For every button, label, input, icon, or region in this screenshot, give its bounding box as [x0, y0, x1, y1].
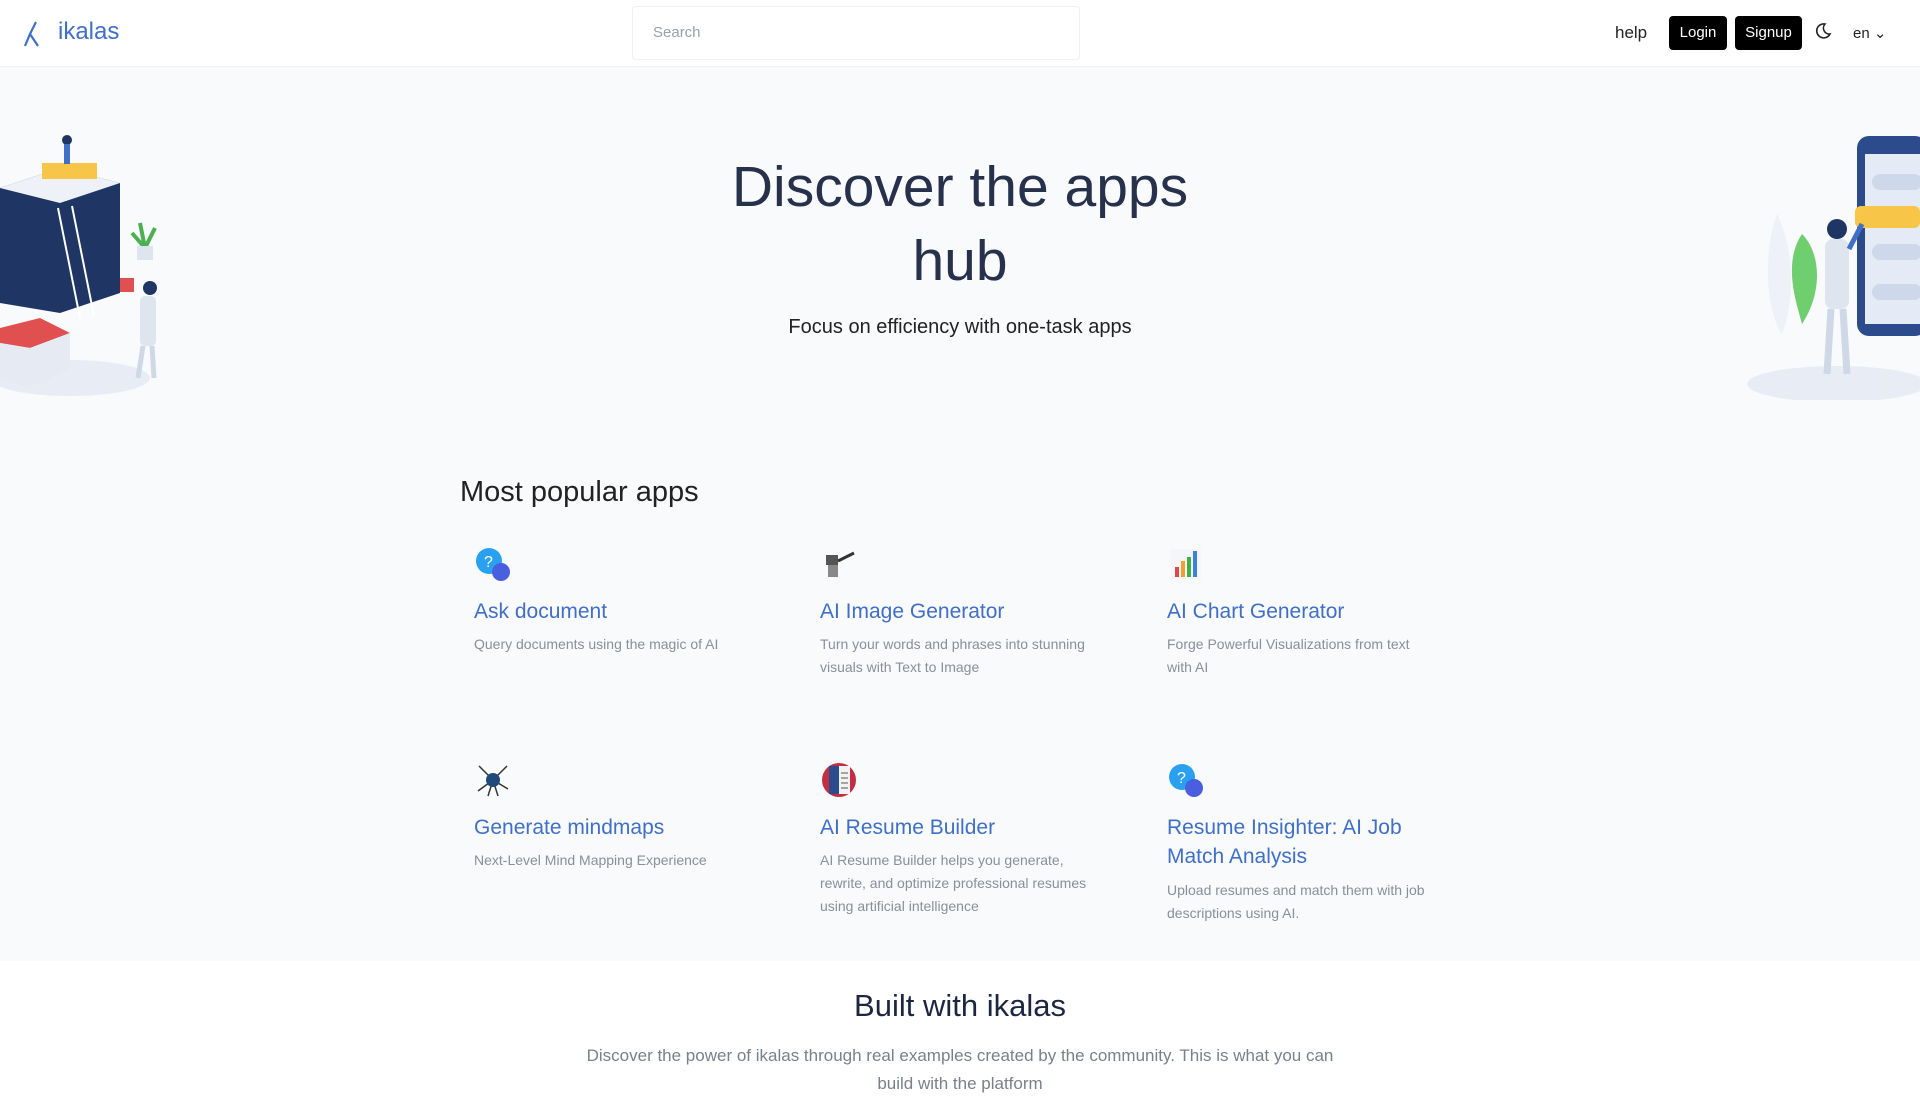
card: ai resume builder: AI Resume Builder helps you generate, — [820, 852, 1064, 868]
illustration: left — [0, 135, 157, 396]
title: Discover the apps — [732, 155, 1188, 219]
icon: question bubble: ? — [1177, 770, 1186, 787]
icon: resume — [822, 763, 856, 797]
card: resume insighter: Resume Insighter: AI Job — [1167, 816, 1402, 839]
card: resume insighter — [1167, 764, 1425, 921]
button: login — [1669, 16, 1727, 50]
subtitle: Focus on efficiency with one-task apps — [788, 316, 1132, 338]
card: ai resume builder: AI Resume Builder — [820, 816, 995, 839]
card: ai image generator — [820, 552, 1085, 675]
section heading: most popular apps: Most popular apps — [460, 476, 699, 508]
card: ai image generator: AI Image Generator — [820, 600, 1004, 623]
card: ai chart generator: AI Chart Generator — [1167, 600, 1344, 623]
card: ai resume builder: rewrite, and optimize professional resumes — [820, 875, 1086, 891]
card: ai chart generator: Forge Powerful Visualizations from text with AI — [1167, 636, 1410, 675]
card: generate mindmaps: Generate mindmaps — [474, 816, 664, 839]
card: ai chart generator — [1167, 551, 1410, 675]
icon: question bubble — [476, 548, 510, 581]
icon: question bubble: ? — [484, 554, 493, 571]
button: signup: Signup — [1745, 24, 1792, 41]
logo: ikalas — [58, 18, 119, 45]
search box: Search — [653, 24, 701, 41]
icon: mindmap — [478, 766, 508, 796]
card: generate mindmaps: Next-Level Mind Mapping Experience — [474, 852, 707, 868]
illustration: right — [1747, 136, 1920, 400]
section heading: built with ikalas: Built with ikalas — [854, 988, 1066, 1023]
section paragraph: Discover the power of ikalas through real examples created by the community. This is what you can build with the platform — [587, 1046, 1333, 1093]
icon: robot painter — [826, 552, 855, 577]
icon: question bubble — [1169, 764, 1203, 797]
icon: bar chart — [1175, 551, 1197, 577]
button: login: Login — [1680, 24, 1716, 41]
card: generate mindmaps — [474, 766, 707, 868]
header — [0, 0, 1920, 67]
language selector: en ⌄ — [1853, 25, 1886, 42]
button: signup — [1735, 16, 1802, 50]
card: ask document: Ask document — [474, 600, 607, 623]
search box — [632, 6, 1080, 60]
nav: help: help — [1615, 23, 1647, 42]
icon: moon — [1816, 23, 1832, 39]
card: ai resume builder: using artificial intelligence — [820, 898, 979, 914]
title: hub — [912, 229, 1008, 293]
card: resume insighter: Match Analysis — [1167, 845, 1307, 868]
card: ai image generator: Turn your words and phrases into stunning visuals with Text to Image — [820, 636, 1085, 675]
card: resume insighter: Upload resumes and match them with job descriptions using AI. — [1167, 882, 1425, 921]
card: ask document: Query documents using the magic of AI — [474, 636, 718, 652]
title — [732, 155, 1188, 293]
card: ai resume builder — [820, 763, 1086, 914]
logo — [24, 18, 119, 47]
card: ask document — [474, 548, 718, 652]
